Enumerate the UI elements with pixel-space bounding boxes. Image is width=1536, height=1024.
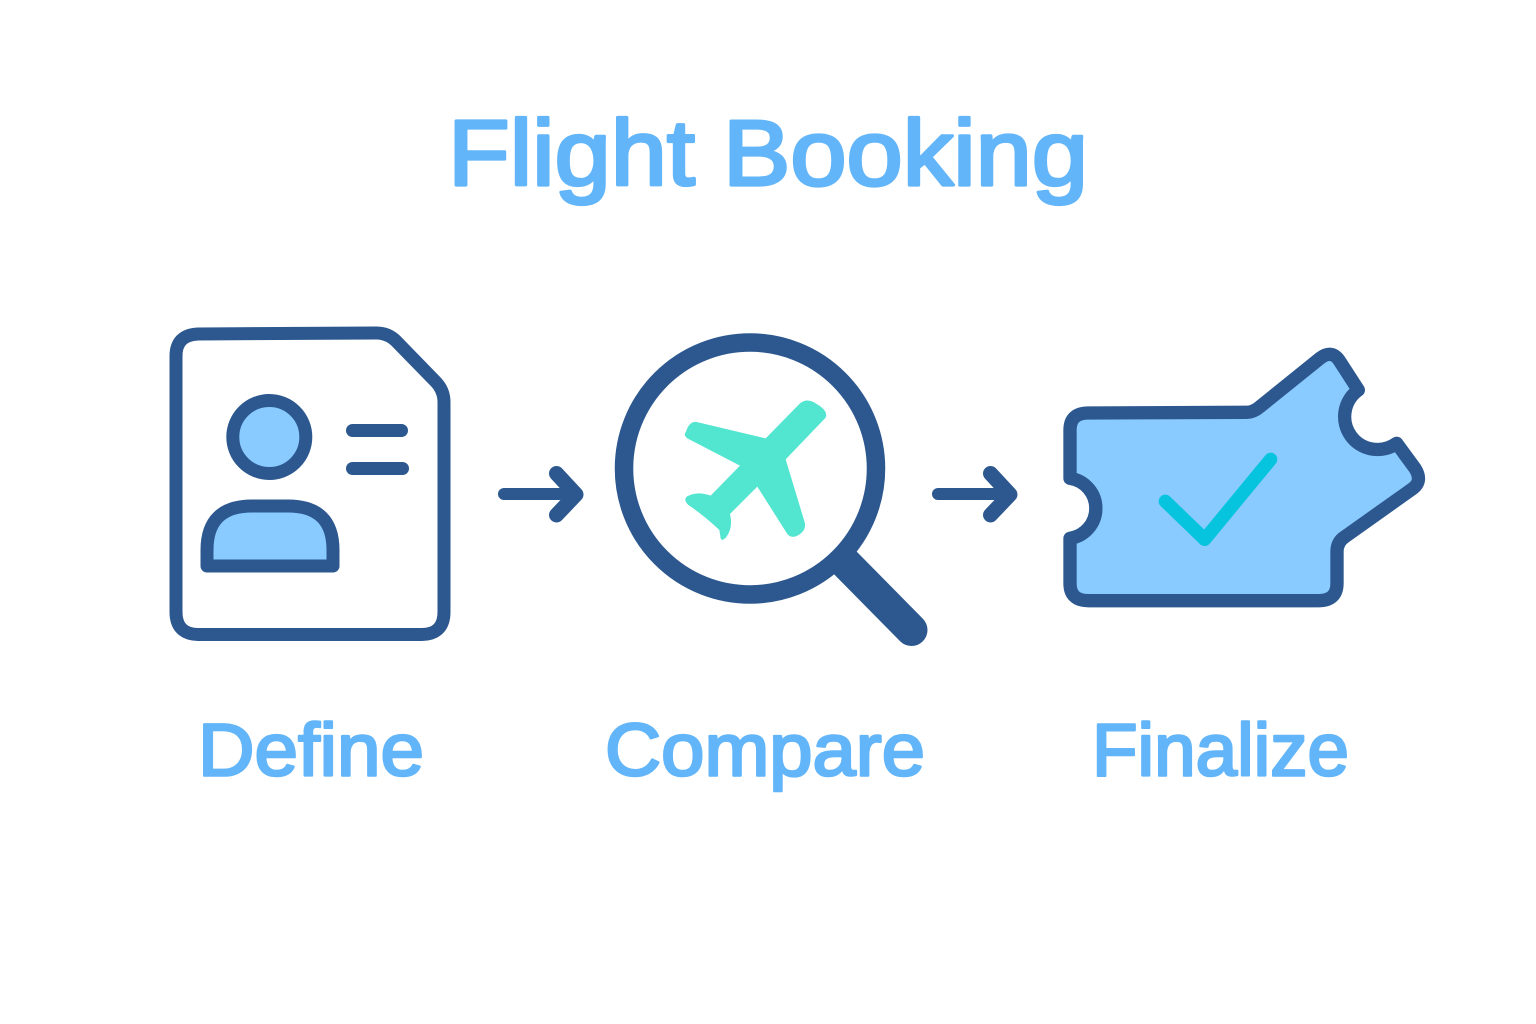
person shoulders	[207, 506, 333, 566]
label: compare: Compare	[605, 708, 925, 792]
plane	[685, 400, 826, 540]
icon: magnifying glass with plane	[624, 342, 912, 630]
magnifier lens	[624, 342, 876, 594]
title: Flight Booking	[448, 101, 1088, 205]
ticket body	[1070, 354, 1418, 601]
check mark	[1165, 459, 1271, 539]
label: finalize: Finalize	[1092, 708, 1349, 792]
magnifier handle	[840, 558, 912, 630]
arrow: define to compare	[504, 474, 577, 515]
text line two	[352, 462, 402, 475]
document outline	[176, 333, 444, 634]
arrow: compare to finalize	[938, 474, 1011, 515]
person head	[233, 400, 306, 474]
label: define: Define	[198, 708, 424, 792]
text line one	[352, 424, 402, 437]
icon: ticket with check mark	[1070, 354, 1418, 601]
icon: passenger profile document	[176, 333, 444, 634]
